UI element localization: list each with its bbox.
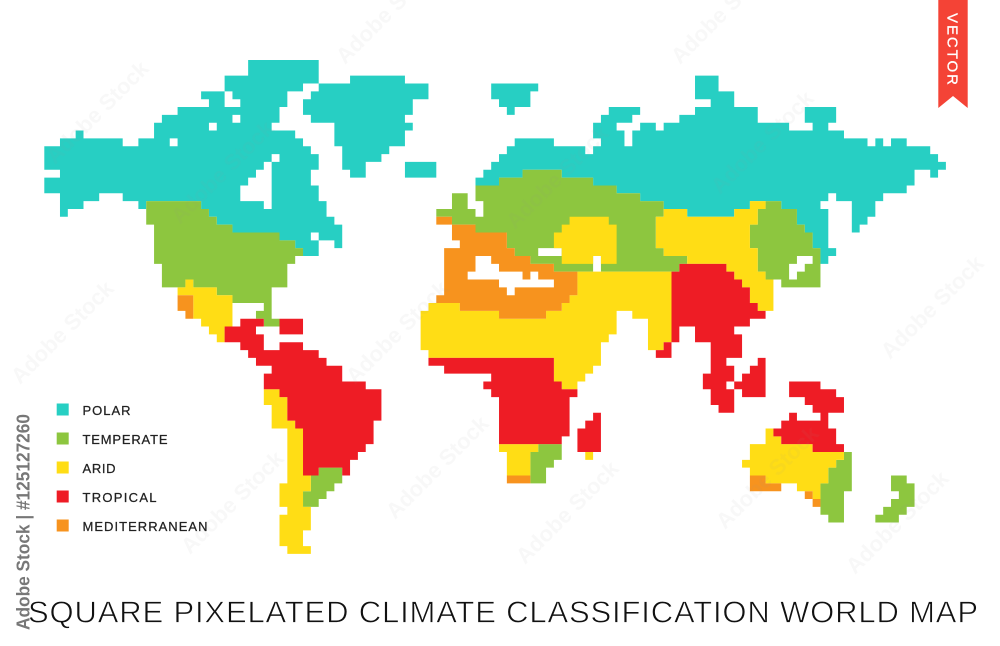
watermark: faint stock marks: Adobe Stock (341, 275, 454, 389)
legend (57, 403, 208, 534)
watermark: faint stock marks: Adobe Stock (41, 55, 154, 169)
legend item: tropical: TROPICAL (82, 490, 156, 505)
watermark: faint stock marks: Adobe Stock (706, 85, 819, 199)
watermark: faint stock marks: Adobe Stock (6, 275, 119, 389)
legend item: mediterranean: MEDITERRANEAN (82, 519, 208, 534)
polar regions (44, 60, 946, 264)
legend item: polar: POLAR (82, 403, 130, 418)
legend item: arid: ARID (82, 461, 116, 476)
watermark: faint stock marks: Adobe Stock (381, 410, 494, 524)
ribbon badge: vector (938, 0, 968, 108)
watermark: faint stock marks: Adobe Stock (511, 455, 624, 569)
title: SQUARE PIXELATED CLIMATE CLASSIFICATION WORLD MAP (28, 594, 978, 630)
watermark: faint stock marks: Adobe Stock (876, 250, 989, 364)
legend item: arid (57, 461, 116, 476)
tropical regions (225, 264, 844, 476)
legend item: temperate: TEMPERATE (82, 432, 168, 447)
ribbon badge: vector: VECTOR (944, 13, 960, 85)
watermark: faint stock marks: Adobe Stock (501, 120, 614, 234)
watermark: faint stock marks: Adobe Stock (176, 445, 289, 559)
watermark: faint stock marks: Adobe Stock (166, 115, 279, 229)
world map (44, 60, 946, 554)
legend item: polar (57, 403, 131, 418)
temperate regions (146, 170, 915, 523)
watermark: faint stock marks: Adobe Stock (841, 465, 954, 579)
mediterranean regions (178, 217, 820, 507)
watermark: faint stock marks: Adobe Stock (711, 420, 824, 534)
stock id vertical text: Adobe Stock | #125127260 (14, 414, 34, 630)
arid regions (178, 201, 844, 554)
